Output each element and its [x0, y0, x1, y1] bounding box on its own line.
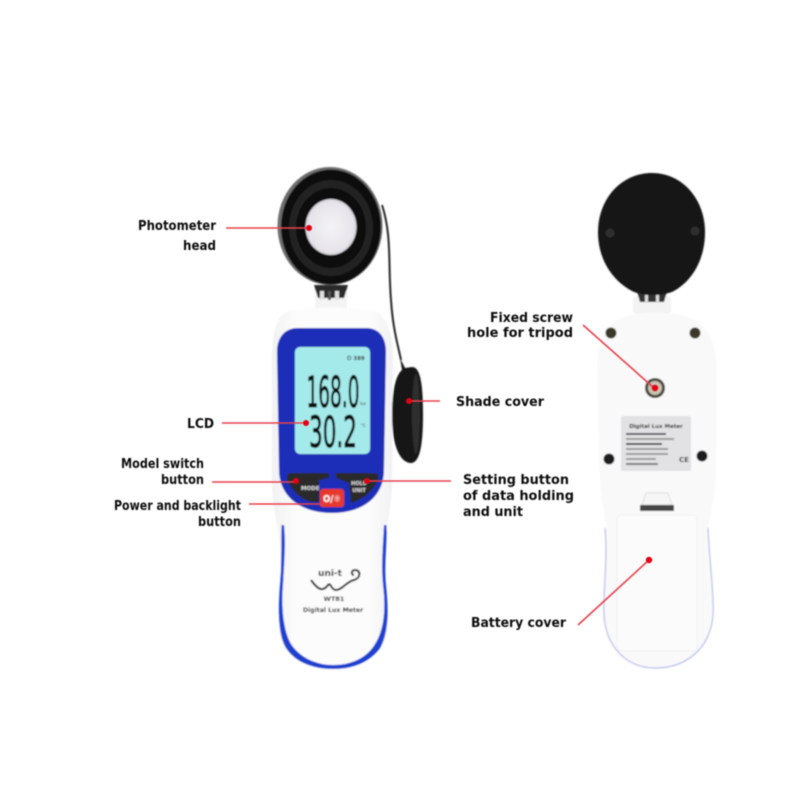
- callout: battery cover: Battery cover: [471, 615, 566, 631]
- brand logo and model: Digital Lux Meter: [303, 607, 364, 614]
- screws: [604, 328, 708, 464]
- front view of lux meter: 168.0: [306, 368, 360, 418]
- front view of lux meter: [272, 167, 423, 670]
- mode button: MODE: [301, 486, 320, 492]
- callout: photometer head: [138, 218, 312, 254]
- blue side trim: [279, 525, 388, 669]
- callout: setting button: and unit: [463, 504, 524, 520]
- battery cover: [617, 515, 697, 651]
- LCD readings: lux: [360, 401, 367, 406]
- LCD readings: ⏻ 389: [347, 355, 365, 362]
- battery latch: [640, 493, 674, 511]
- back body: [597, 312, 717, 669]
- callout: power and backlight button: button: [198, 514, 241, 530]
- back view of lux meter: [597, 173, 717, 669]
- mode button: [287, 473, 329, 502]
- callout: tripod screw hole: [467, 310, 658, 391]
- tripod screw hole: [645, 378, 665, 398]
- callout: power and backlight button: [114, 498, 325, 530]
- brand logo and model: uni-t: [318, 569, 343, 579]
- callout: photometer head: head: [183, 238, 216, 254]
- shade cover: [392, 358, 423, 463]
- back of head: [598, 173, 705, 295]
- callout: tripod screw hole: Fixed screw: [490, 310, 573, 326]
- device body: [272, 308, 393, 670]
- hold unit button: UNIT: [352, 488, 366, 494]
- callout: model switch button: Model switch: [121, 456, 204, 472]
- callout: tripod screw hole: hole for tripod: [467, 325, 573, 341]
- blue display panel: [277, 328, 386, 513]
- callout: setting button: [364, 472, 574, 520]
- callout: model switch button: [121, 456, 299, 488]
- back blue trim: [604, 528, 713, 668]
- hold unit button: [336, 473, 378, 503]
- callout: power and backlight button: Power and backlight: [114, 498, 241, 514]
- LCD readings: [306, 355, 367, 458]
- spec label: [621, 416, 691, 471]
- photometer head: [278, 167, 382, 285]
- LCD readings: °C: [361, 423, 366, 428]
- callout: LCD: LCD: [187, 416, 214, 432]
- callout: battery cover: [471, 557, 652, 631]
- LCD screen: [295, 347, 370, 454]
- strap cord: [382, 205, 401, 360]
- LCD readings: 30.2: [309, 408, 357, 458]
- callout: model switch button: button: [161, 472, 204, 488]
- brand logo and model: [303, 569, 364, 614]
- callout: setting button: of data holding: [463, 488, 574, 504]
- spec label: CE: [679, 456, 689, 464]
- neck connector: [314, 285, 348, 315]
- callout: LCD: [187, 416, 309, 432]
- callout: setting button: Setting button: [463, 472, 569, 488]
- callout: shade cover: [406, 394, 544, 410]
- callout: photometer head: Photometer: [138, 218, 216, 234]
- spec label: Digital Lux Meter: [629, 424, 683, 430]
- power button: O/☼: [323, 494, 341, 505]
- power button: [320, 489, 344, 507]
- callout: shade cover: Shade cover: [456, 394, 544, 410]
- hold unit button: HOLD: [351, 481, 367, 487]
- back neck connector: [633, 288, 671, 314]
- brand logo and model: WT81: [324, 595, 345, 603]
